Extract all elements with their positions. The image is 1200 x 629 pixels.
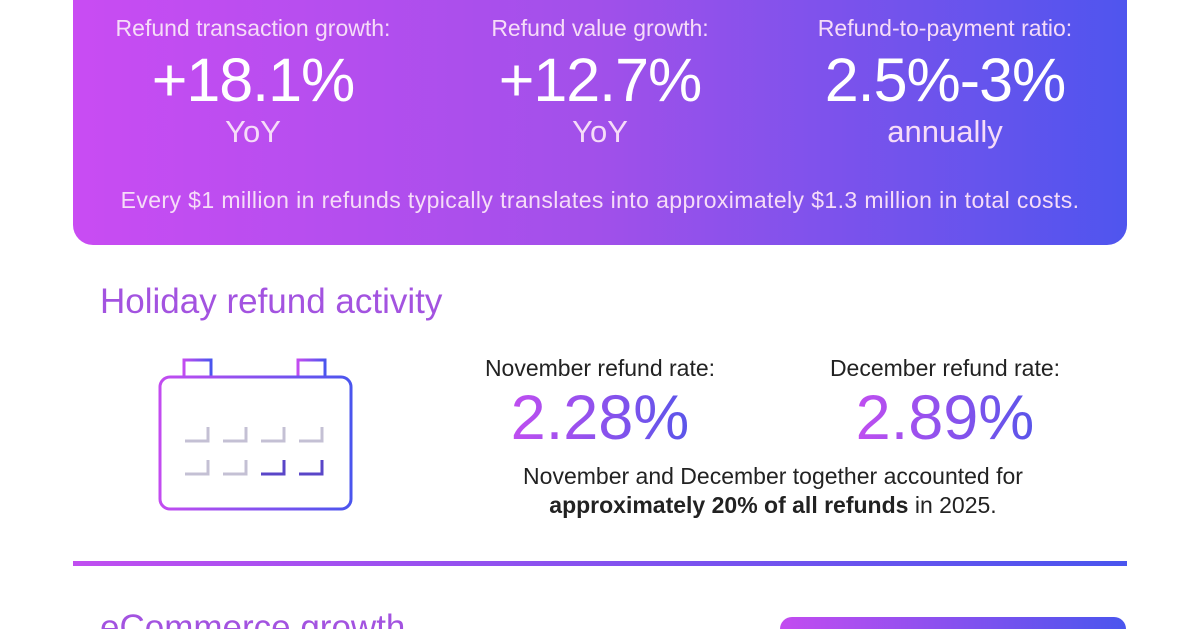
- stat: refund value growth: YoY: [572, 114, 628, 149]
- stat: november refund rate: [485, 355, 715, 453]
- divider line: [73, 561, 1127, 566]
- text: holiday share note: approximately 20% of all refunds in 2025.: [549, 492, 997, 518]
- stat: november refund rate: November refund rate:: [485, 355, 715, 381]
- stat: refund transaction growth: Refund transaction growth:: [116, 15, 390, 41]
- stat: refund-to-payment ratio: Refund-to-payment ratio:: [818, 15, 1072, 41]
- stat: december refund rate: 2.89%: [856, 383, 1034, 453]
- icon: calendar: [158, 358, 352, 510]
- panel: key refund stats: [73, 0, 1127, 245]
- stat: refund transaction growth: +18.1%: [152, 46, 354, 114]
- stat: december refund rate: [830, 355, 1060, 453]
- pill: eCommerce stat: [780, 617, 1126, 629]
- stat: refund-to-payment ratio: 2.5%-3%: [825, 46, 1065, 114]
- stat: refund transaction growth: YoY: [225, 114, 281, 149]
- stat: november refund rate: 2.28%: [511, 383, 689, 453]
- stat: refund transaction growth: [116, 15, 390, 149]
- text: cost note: Every $1 million in refunds typically translates into approximately $1.3 million in total costs.: [121, 187, 1079, 213]
- text: holiday share note: [523, 463, 1023, 518]
- heading: holiday refund activity: Holiday refund activity: [100, 282, 442, 321]
- text: holiday share note: November and December together accounted for: [523, 463, 1023, 489]
- stat: refund value growth: +12.7%: [499, 46, 701, 114]
- stat: refund value growth: Refund value growth:: [491, 15, 709, 41]
- stat: refund-to-payment ratio: [818, 15, 1072, 149]
- stat: refund value growth: [491, 15, 709, 149]
- stat: december refund rate: December refund rate:: [830, 355, 1060, 381]
- stat: refund-to-payment ratio: annually: [887, 114, 1003, 149]
